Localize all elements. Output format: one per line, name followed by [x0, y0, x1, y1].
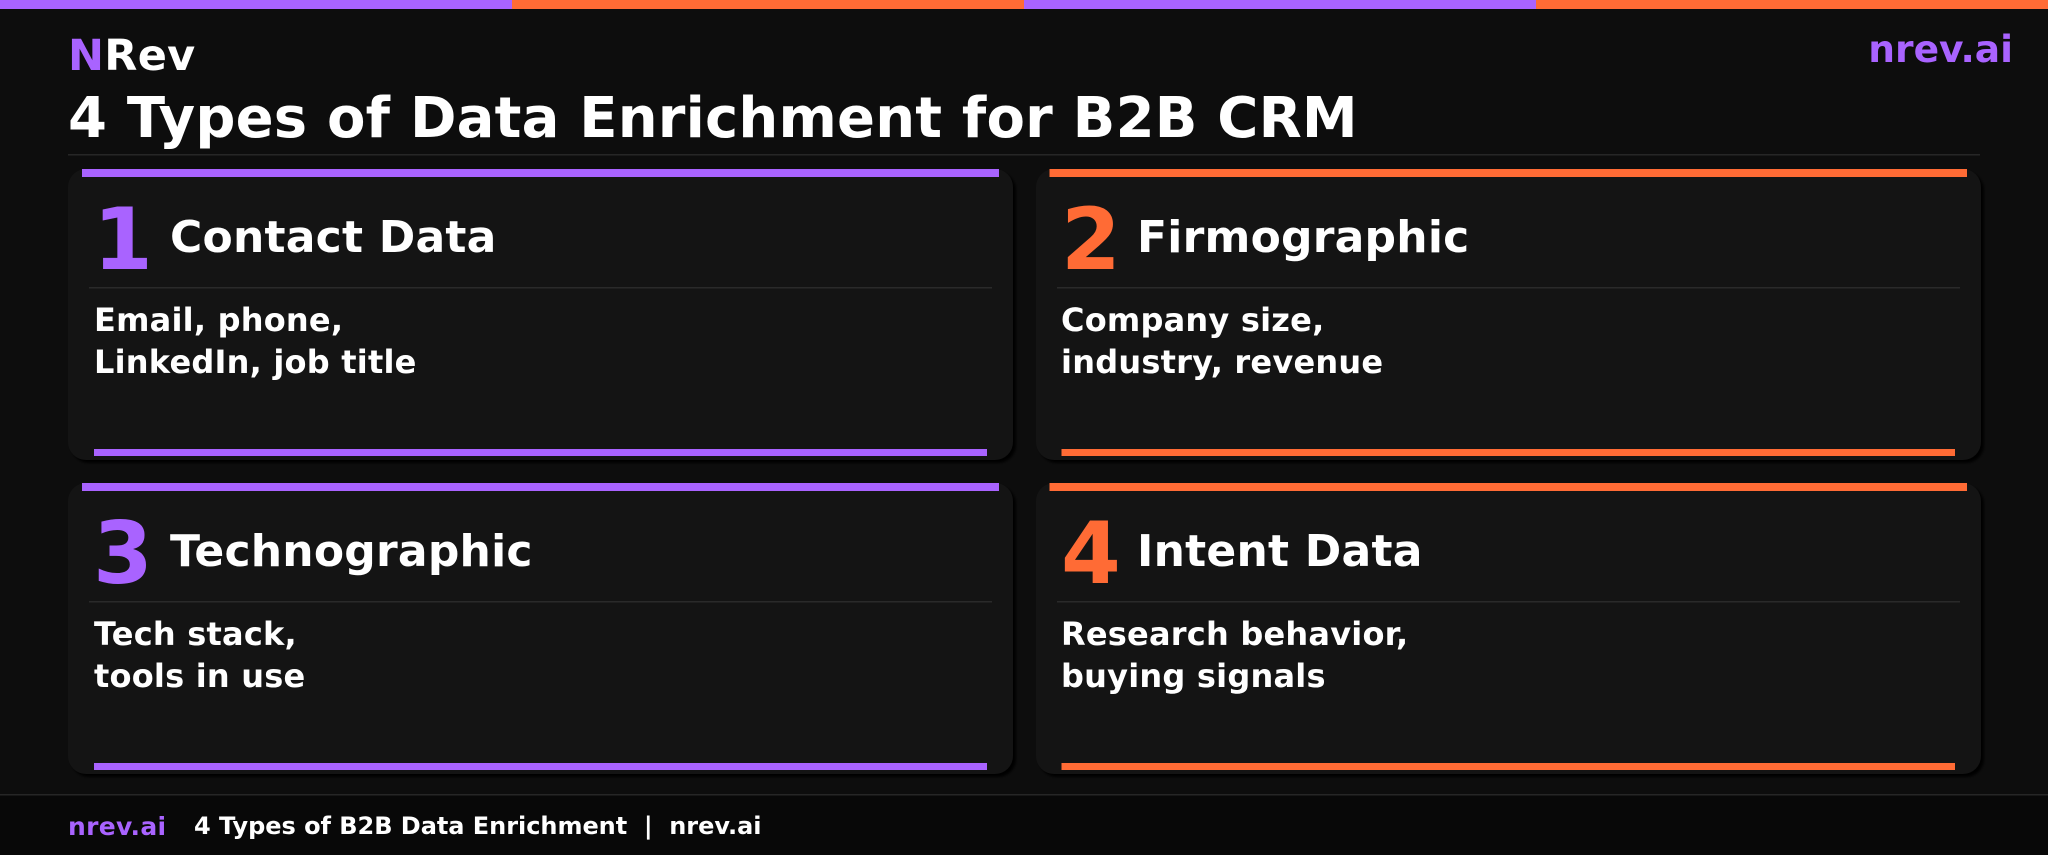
- panel: technographic: [68, 483, 1016, 777]
- description: intent data: buying signals: [1061, 657, 1326, 695]
- footer brand: nrev.ai: [68, 812, 166, 841]
- description: intent data: Research behavior,: [1061, 615, 1408, 653]
- title: 4 Types of Data Enrichment for B2B CRM: [68, 86, 1358, 151]
- number 3: 3: [93, 504, 153, 604]
- description: technographic: Tech stack,: [94, 615, 297, 653]
- panel: firmographic: [1036, 169, 1984, 463]
- panel: intent data: [1036, 483, 1984, 777]
- description: contact data: LinkedIn, job title: [94, 343, 417, 381]
- heading: firmographic: Firmographic: [1137, 212, 1469, 263]
- heading: technographic: Technographic: [170, 526, 533, 577]
- heading: contact data: Contact Data: [170, 212, 497, 263]
- description: firmographic: Company size,: [1061, 301, 1324, 339]
- number 4: 4: [1061, 504, 1121, 604]
- description: technographic: tools in use: [94, 657, 305, 695]
- description: contact data: Email, phone,: [94, 301, 343, 339]
- number 1: 1: [93, 190, 153, 290]
- top accent bar: [0, 0, 2048, 9]
- footer: [0, 794, 2048, 855]
- number 2: 2: [1061, 190, 1121, 290]
- panel: contact data: [68, 169, 1016, 463]
- footer caption: 4 Types of B2B Data Enrichment | nrev.ai: [194, 812, 761, 840]
- site url top right: nrev.ai: [1868, 27, 2013, 71]
- description: firmographic: industry, revenue: [1061, 343, 1383, 381]
- heading: intent data: Intent Data: [1137, 526, 1423, 577]
- brand logo: NRev: [68, 31, 196, 81]
